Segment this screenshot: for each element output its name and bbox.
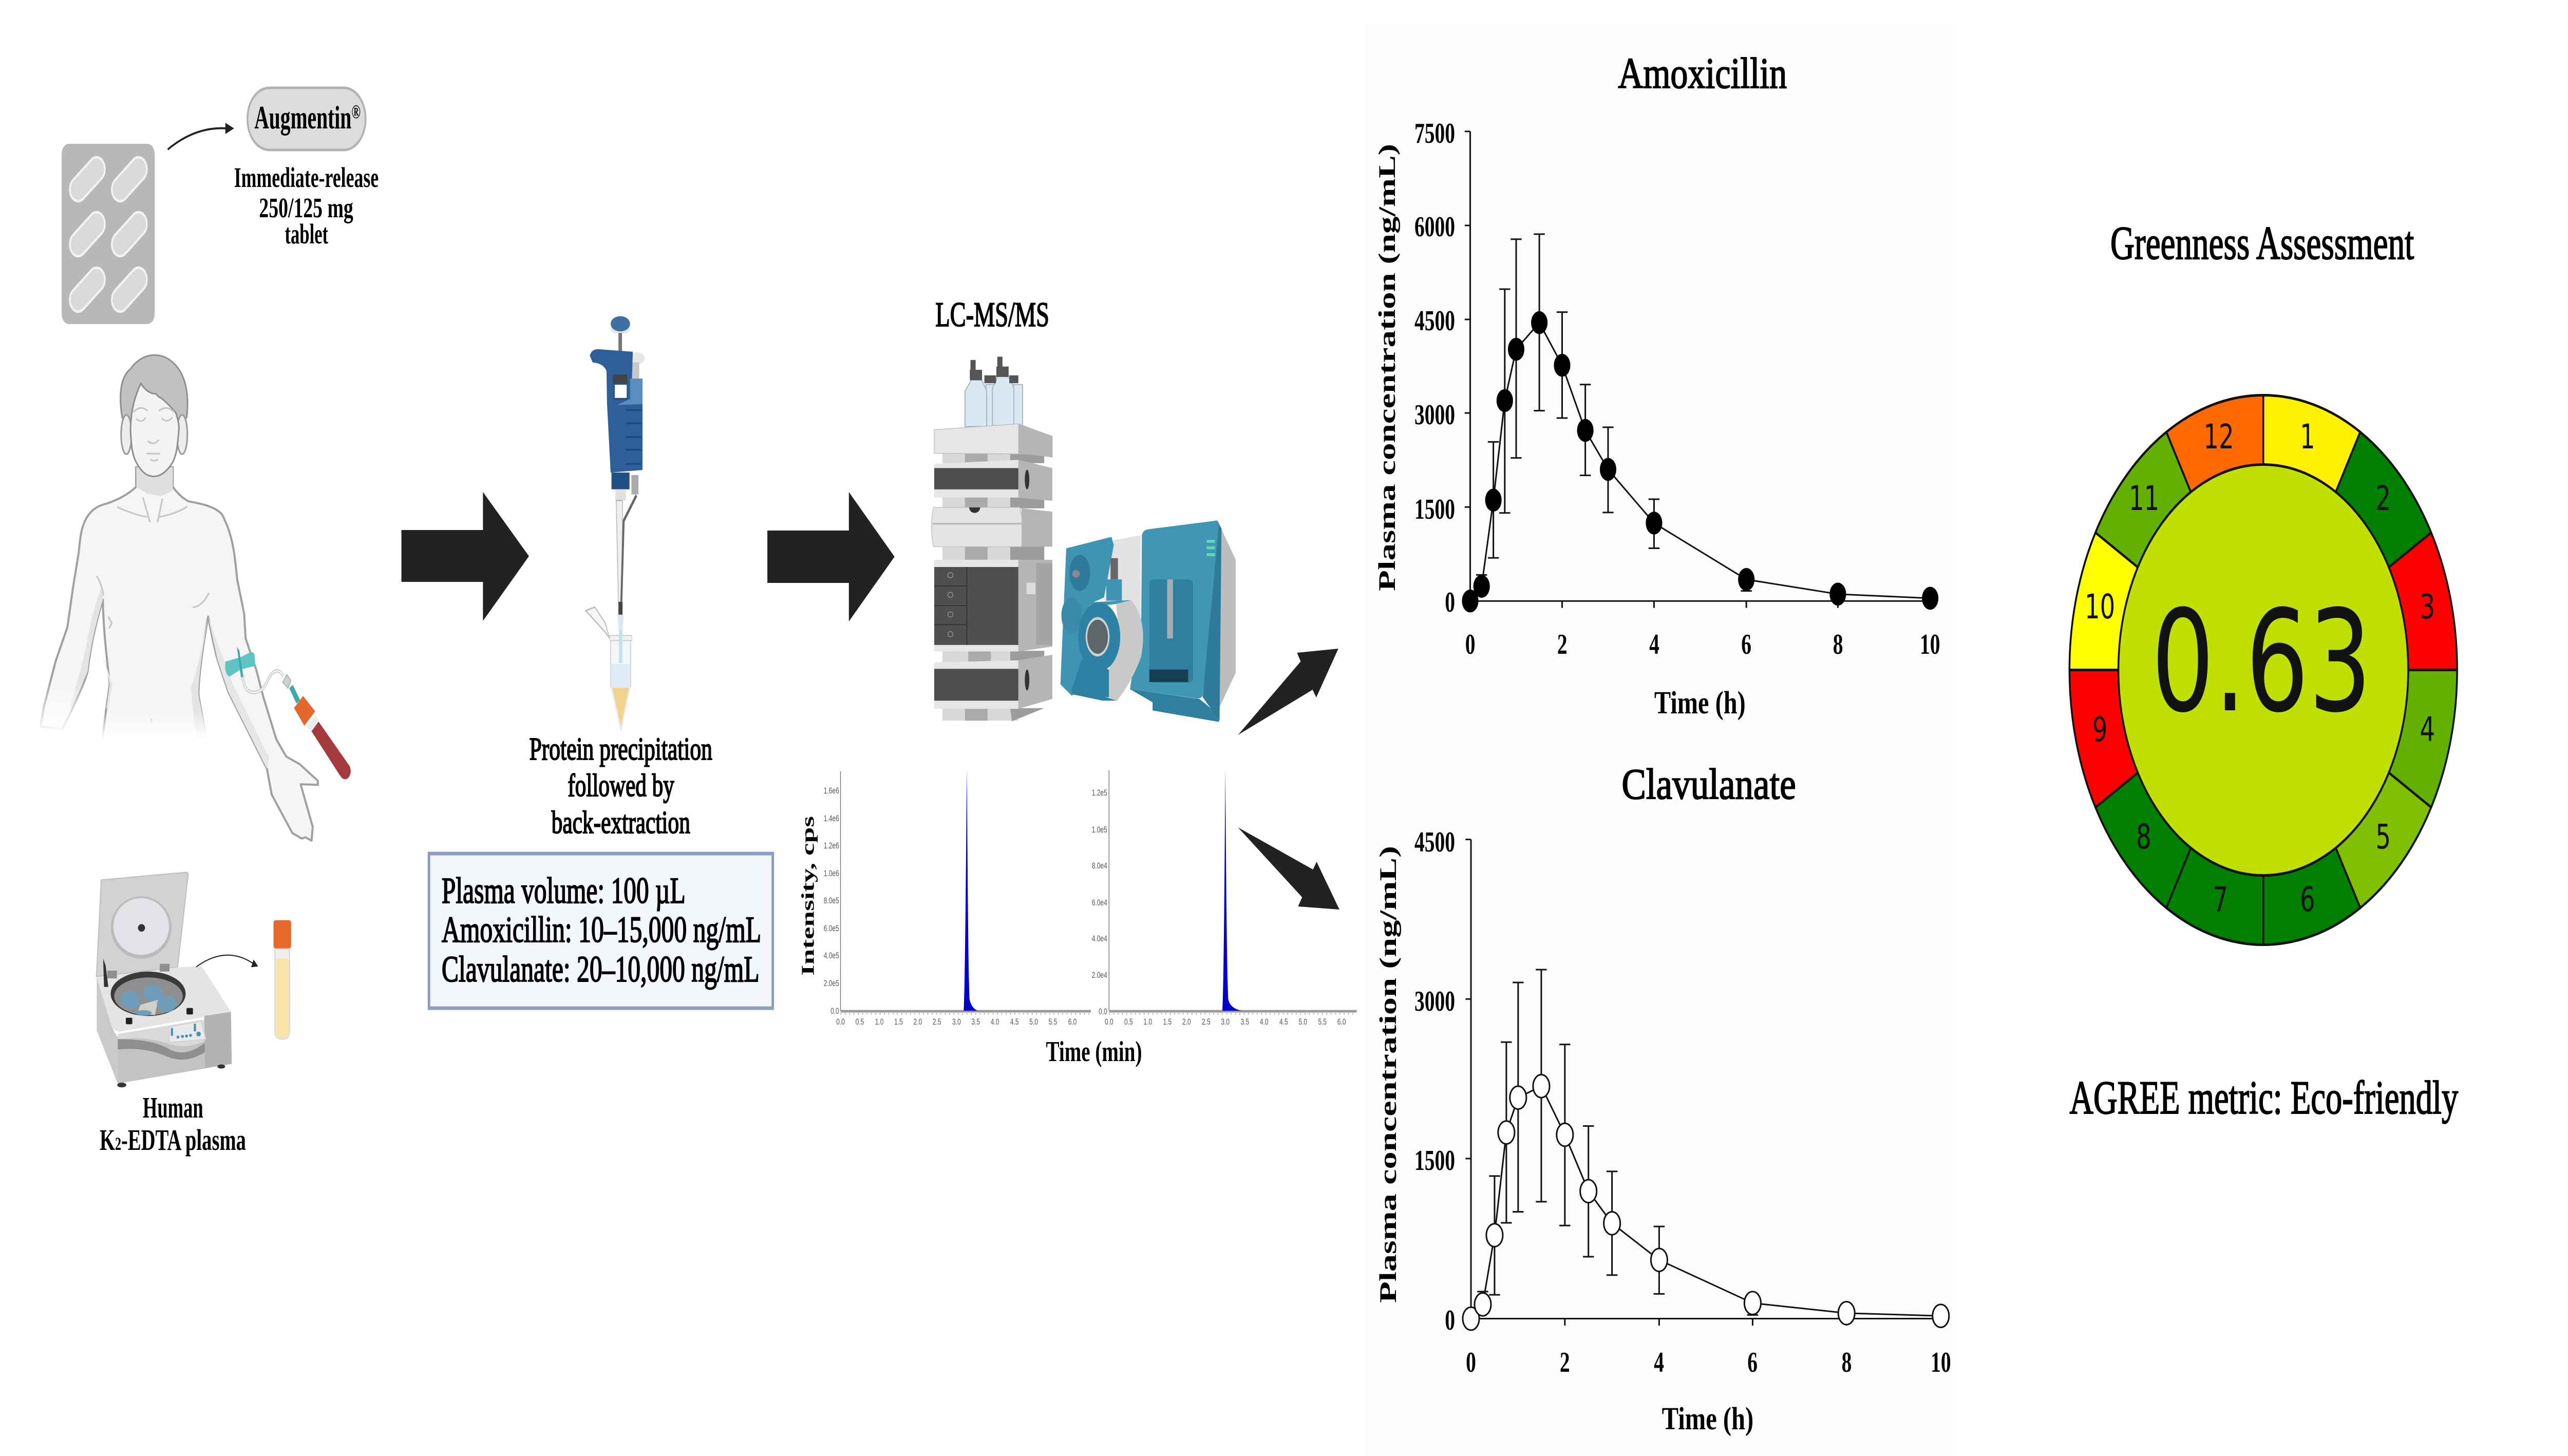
y-axis ticks: amoxicillin: 0 [1445,587,1455,618]
chromatogram: amoxicillin: 4.0 [991,1017,999,1027]
y-axis ticks: amoxicillin [1414,118,1455,618]
x-axis ticks: clavulanate: 2 [1560,1347,1570,1378]
chromatogram: amoxicillin: 5.0 [1029,1017,1038,1027]
chromatogram: clavulanate: 6.0e4 [1092,898,1107,908]
tablet label: Augmentin [248,88,366,150]
chromatogram: amoxicillin: 4.0e5 [824,951,839,961]
chromatogram: clavulanate: 0.0 [1105,1017,1113,1027]
chromatogram: clavulanate: 6.0 [1337,1017,1346,1027]
segment numbers: 12 [2203,418,2234,457]
segment numbers: 9 [2092,710,2107,749]
segment numbers: 1 [2300,418,2315,457]
arrow: blister to tablet [168,123,234,149]
icon: human figure [36,355,318,841]
y-axis title: amoxicillin: Plasma concentration (ng/mL) [1374,144,1400,591]
y-axis title: clavulanate: Plasma concentration (ng/mL) [1375,846,1402,1303]
callout: method parameters: Clavulanate: 20–10,000 ng/mL [442,949,760,990]
y-axis ticks: amoxicillin: 1500 [1414,494,1455,525]
x-axis ticks: amoxicillin: 0 [1465,629,1475,660]
arrow: to amoxicillin plot [1238,649,1338,735]
chart title: Clavulanate: Clavulanate [1621,760,1796,808]
callout: method parameters [429,854,773,1008]
x-axis ticks: amoxicillin: 6 [1741,629,1751,660]
segment numbers: 6 [2300,880,2315,919]
y-axis ticks: amoxicillin: 3000 [1414,399,1455,431]
chromatogram: amoxicillin: 2.0e5 [824,979,839,989]
text: plasma label: Human [143,1091,203,1124]
chromatogram: amoxicillin: 0.0 [836,1017,845,1027]
text: tablet description: tablet [285,219,328,250]
chromatogram: amoxicillin: 8.0e5 [824,896,839,906]
score: 0.63: 0.63 [2151,580,2372,744]
text: extraction caption: back-extraction [552,805,690,840]
chromatogram: amoxicillin: 4.5 [1010,1017,1019,1027]
x-axis ticks: amoxicillin: 8 [1833,629,1843,660]
text: tablet description: Immediate-release [234,163,379,194]
arrow: extraction to LC-MS/MS [767,492,895,621]
callout: method parameters: Plasma volume: 100 µL [442,870,686,911]
segment numbers [2085,418,2435,919]
y-axis ticks: clavulanate [1414,826,1455,1336]
chromatogram: clavulanate: 5.5 [1318,1017,1327,1027]
icon: blister pack [62,144,155,324]
segment numbers: 2 [2375,479,2391,518]
icon: HPLC stack [932,357,1052,721]
segment numbers: 4 [2420,710,2435,749]
y-axis ticks: clavulanate: 4500 [1414,826,1455,858]
chart: chromatograms [798,769,1357,1068]
x-axis ticks: clavulanate: 0 [1466,1347,1476,1378]
chromatogram: clavulanate: 0.5 [1124,1017,1133,1027]
chromatogram: amoxicillin: 1.6e6 [824,786,839,796]
segment numbers: 10 [2085,588,2115,627]
chart title: Amoxicillin: Amoxicillin [1618,49,1787,97]
text: extraction caption [530,731,712,840]
segment numbers: 3 [2420,588,2435,627]
chart: clavulanate concentration-time [1375,760,1951,1436]
chromatogram: amoxicillin: 6.0e5 [824,924,839,934]
x-axis ticks: clavulanate: 4 [1654,1347,1664,1378]
x-axis ticks: amoxicillin: 2 [1557,629,1568,660]
chromatogram: amoxicillin: 5.5 [1049,1017,1057,1027]
chart: AGREE pictogram [2069,395,2457,945]
axis label: intensity: Intensity, cps [798,816,818,976]
arrow: centrifuge to tube [196,955,258,967]
icon: centrifuge [97,872,232,1087]
chromatogram: amoxicillin: 3.5 [971,1017,980,1027]
chromatogram: amoxicillin: 1.0 [875,1017,883,1027]
x-axis ticks: amoxicillin: 4 [1649,629,1659,660]
x-axis ticks: clavulanate: 10 [1931,1347,1951,1378]
tablet label: Augmentin: ® [351,102,361,123]
chromatogram: amoxicillin: 2.5 [933,1017,941,1027]
caption: AGREE metric: AGREE metric: Eco-friendly [2069,1072,2458,1124]
y-axis ticks: clavulanate: 0 [1445,1304,1455,1336]
chromatogram: amoxicillin: 2.0 [913,1017,922,1027]
axis label: time in minutes: Time (min) [1046,1036,1142,1068]
y-axis ticks: amoxicillin: 4500 [1414,305,1455,337]
chromatogram: amoxicillin: 6.0 [1068,1017,1077,1027]
chromatogram: clavulanate: 4.5 [1279,1017,1288,1027]
chromatogram: clavulanate: 4.0 [1260,1017,1269,1027]
text: extraction caption: followed by [568,768,674,803]
x-axis ticks: amoxicillin [1465,629,1940,660]
chromatogram: clavulanate: 2.0 [1182,1017,1191,1027]
chromatogram: clavulanate: 1.0 [1143,1017,1152,1027]
x-axis ticks: clavulanate: 8 [1842,1347,1852,1378]
chart: amoxicillin concentration-time [1374,49,1940,721]
x-axis ticks: clavulanate: 6 [1747,1347,1758,1378]
chromatogram: clavulanate: 2.5 [1202,1017,1211,1027]
chromatogram: clavulanate: 3.5 [1240,1017,1249,1027]
text: plasma label [100,1091,246,1157]
chromatogram: clavulanate: 3.0 [1221,1017,1230,1027]
arrow: sample to extraction [402,492,529,621]
chromatogram: amoxicillin: 3.0 [952,1017,961,1027]
callout: method parameters: Amoxicillin: 10–15,000 ng/mL [442,909,761,950]
y-axis ticks: clavulanate: 1500 [1414,1145,1455,1177]
text: tablet description: 250/125 mg [259,193,353,224]
y-axis ticks: clavulanate: 3000 [1414,986,1455,1017]
x-axis title: amoxicillin: Time (h) [1654,685,1746,721]
plot area: amoxicillin [1462,131,1938,613]
chromatogram: amoxicillin: 1.4e6 [824,814,839,824]
icon: plasma tube [274,920,291,1039]
x-axis ticks: amoxicillin: 10 [1920,629,1940,660]
icon: blood collection set [225,647,351,779]
chromatogram: clavulanate: 4.0e4 [1092,934,1107,944]
segment numbers: 11 [2129,479,2159,518]
y-axis ticks: amoxicillin: 6000 [1414,211,1455,243]
y-axis ticks: amoxicillin: 7500 [1414,118,1455,149]
chromatogram: clavulanate: 5.0 [1298,1017,1307,1027]
chromatogram: clavulanate [1092,769,1357,1027]
chromatogram: amoxicillin: 1.2e6 [824,841,839,851]
chromatogram: amoxicillin: 0.0 [830,1007,839,1016]
x-axis ticks: clavulanate [1466,1347,1951,1378]
chromatogram: amoxicillin: 1.0e6 [824,869,839,879]
text: tablet description [234,163,379,250]
plot area: clavulanate [1463,839,1949,1330]
heading: Greenness Assessment: Greenness Assessment [2110,217,2414,270]
chromatogram: amoxicillin [824,769,1091,1027]
chromatogram: clavulanate: 1.2e5 [1092,788,1107,798]
x-axis title: clavulanate: Time (h) [1662,1401,1753,1436]
chromatogram: amoxicillin: 1.5 [894,1017,903,1027]
icon: pipette and tube [586,316,645,729]
chromatogram: clavulanate: 1.0e5 [1092,825,1107,835]
chromatogram: clavulanate: 2.0e4 [1092,971,1107,980]
segment numbers: 8 [2136,818,2151,857]
heading: LC-MS/MS: LC-MS/MS [935,295,1049,334]
chromatogram: clavulanate: 1.5 [1163,1017,1172,1027]
tablet label: Augmentin: Augmentin [254,99,365,136]
arrow: to clavulanate plot [1238,827,1339,910]
text: plasma label: K2-EDTA plasma [100,1123,246,1157]
chromatogram: clavulanate: 0.0 [1099,1007,1107,1017]
chromatogram: amoxicillin: 0.5 [856,1017,864,1027]
segment numbers: 7 [2213,880,2228,919]
text: extraction caption: Protein precipitation [530,731,712,767]
segment numbers: 5 [2375,818,2391,857]
chromatogram: clavulanate: 8.0e4 [1092,861,1107,871]
icon: mass spectrometer [1061,520,1236,722]
